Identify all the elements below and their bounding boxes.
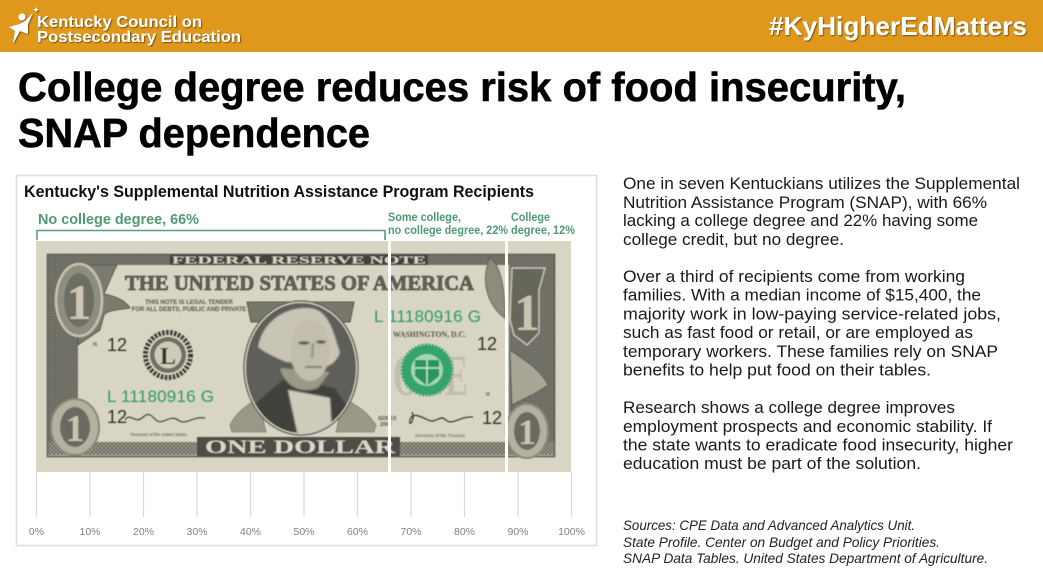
legal tender	[132, 300, 246, 313]
wreath leaves	[230, 398, 376, 432]
text block: working families: Over a third of recipients come from working	[623, 268, 965, 286]
Washington D.C.: WASHINGTON, D.C.	[393, 330, 466, 339]
leaves right	[485, 258, 505, 318]
axis labels: 80%	[454, 526, 475, 538]
axis labels: 60%	[347, 526, 368, 538]
treasury captions	[130, 432, 466, 438]
small marks: 2003	[380, 422, 391, 428]
axis labels: 0%	[29, 526, 44, 538]
small marks: SERIES	[378, 416, 397, 422]
bracket	[37, 230, 385, 240]
small marks	[93, 342, 490, 428]
dollar bill illustration	[36, 241, 571, 474]
black seal L	[146, 332, 190, 378]
text block: working families: temporary workers. These families rely on SNAP	[623, 343, 998, 361]
text block: overview: lacking a college degree and 22% having some	[623, 212, 978, 230]
label: college degree: College	[511, 212, 550, 224]
corner oval top left	[56, 264, 102, 336]
signature left	[125, 414, 205, 422]
label: some college: Some college,	[388, 212, 461, 224]
axis labels: 20%	[133, 526, 154, 538]
axis labels: 50%	[293, 526, 315, 538]
sources: SNAP Data Tables. United States Department of Agriculture.	[623, 550, 988, 566]
leaves lower right	[510, 350, 548, 405]
label: some college	[388, 212, 508, 237]
axis labels: 10%	[79, 526, 101, 538]
serial number upper right: L 11180916 G	[374, 307, 481, 326]
text block: research: the state wants to eradicate food insecurity, higher	[623, 436, 1014, 454]
label: some college: no college degree, 22%	[388, 225, 508, 237]
axis labels: 100%	[558, 526, 585, 538]
bill paper	[36, 241, 571, 472]
corner oval bottom right	[506, 404, 548, 458]
text block: overview: One in seven Kentuckians utilizes the Supplemental	[623, 175, 1020, 193]
plate numbers: 12	[107, 335, 127, 355]
label: college degree	[511, 212, 575, 237]
text block: research: education must be part of the solution.	[623, 455, 921, 473]
serial number lower left: L 11180916 G	[107, 387, 214, 406]
label: no college degree: No college degree, 66%	[38, 211, 199, 228]
text block: working families	[623, 268, 1001, 380]
divider cuts at 66% and 88%	[388, 241, 508, 474]
text block: research: Research shows a college degree improves	[623, 399, 955, 417]
text block: working families: majority work in low-paying service-related jobs,	[623, 306, 1001, 324]
federal reserve note: FEDERAL RESERVE NOTE	[172, 256, 427, 266]
faint ONE: ONE	[393, 343, 468, 408]
sources	[623, 517, 988, 566]
sources: State Profile. Center on Budget and Policy Priorities.	[623, 534, 940, 550]
axis labels: 40%	[240, 526, 261, 538]
label: college degree: degree, 12%	[511, 225, 575, 237]
text block: working families: such as fast food or retail, or are employed as	[623, 324, 973, 342]
signature right	[410, 412, 473, 423]
logo text: Kentucky Council on	[37, 14, 202, 31]
text block: working families: benefits to help put food on their tables.	[623, 362, 931, 380]
shield top right: 1	[514, 285, 540, 342]
corner oval bottom left: 1	[66, 408, 84, 450]
icon: star figure logo	[9, 7, 39, 44]
treasury captions: Secretary of the Treasury	[415, 433, 466, 438]
text block: research: employment prospects and economic stability. If	[623, 418, 992, 436]
treasury captions: Treasurer of the United States	[130, 432, 188, 437]
hashtag: #KyHigherEdMatters	[769, 11, 1027, 41]
axis labels: 90%	[507, 526, 529, 538]
axis ticks	[36, 472, 572, 517]
leaves left	[78, 265, 130, 345]
shield top right	[510, 268, 545, 345]
header band	[0, 0, 1043, 52]
text block: working families: families. With a median income of $15,400, the	[623, 286, 981, 304]
title	[18, 64, 906, 156]
text block: overview: Nutrition Assistance Program (SNAP), with 66%	[623, 194, 987, 212]
corner oval bottom right: 1	[518, 412, 536, 452]
portrait of Washington	[240, 300, 362, 440]
title: College degree reduces risk of food insecurity,	[18, 64, 906, 110]
black seal L: L	[160, 344, 176, 370]
bill frame	[48, 254, 554, 456]
chart heading: Kentucky's Supplemental Nutrition Assistance Program Recipients	[24, 183, 534, 201]
small marks: H.	[93, 342, 99, 348]
green treasury seal	[402, 345, 452, 395]
plate numbers: 12	[107, 407, 127, 427]
logo text: Postsecondary Education	[37, 29, 241, 46]
axis labels: 70%	[400, 526, 422, 538]
legal tender: THIS NOTE IS LEGAL TENDER	[145, 300, 233, 306]
plate numbers: 12	[477, 334, 497, 354]
one dollar: ONE DOLLAR	[205, 437, 395, 458]
text block: overview	[623, 175, 1020, 249]
axis labels: 30%	[186, 526, 208, 538]
sources: Sources: CPE Data and Advanced Analytics Unit.	[623, 517, 915, 533]
united states of america: THE UNITED STATES OF AMERICA	[125, 271, 475, 295]
title: SNAP dependence	[18, 110, 370, 156]
axis labels	[29, 526, 585, 538]
corner oval bottom left	[51, 399, 99, 455]
logo text	[37, 14, 241, 46]
text block: overview: college credit, but no degree.	[623, 231, 844, 249]
panel: chart	[16, 176, 596, 546]
plate numbers	[107, 334, 502, 428]
plate numbers: 12	[482, 408, 502, 428]
legal tender: FOR ALL DEBTS, PUBLIC AND PRIVATE	[132, 307, 246, 313]
small marks: H	[486, 392, 490, 398]
corner oval top left: 1	[66, 274, 92, 330]
text block: research	[623, 399, 1014, 473]
